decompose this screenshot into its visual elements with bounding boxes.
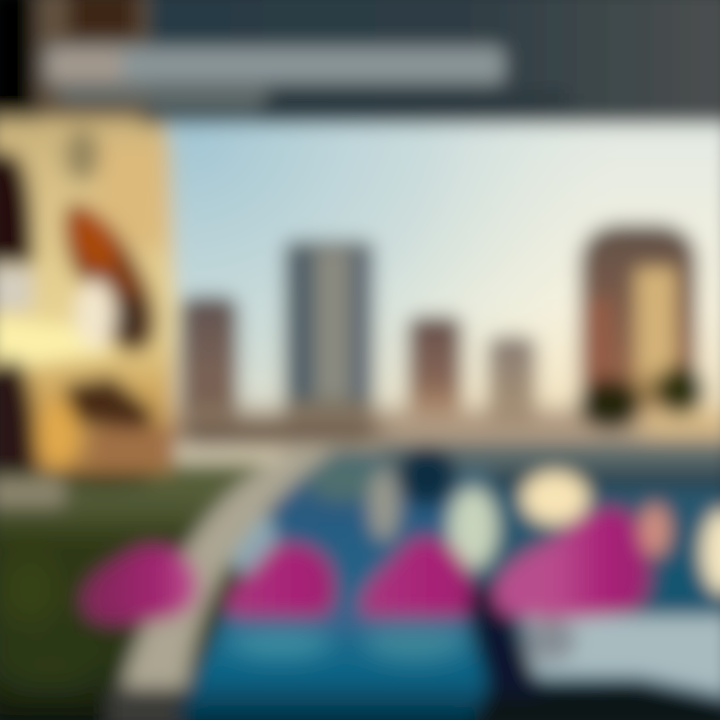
teal ripples [228,627,332,657]
sky [130,100,720,470]
ledge [0,318,120,366]
building wall [0,118,176,472]
grey upper water left [309,462,381,502]
foreground building [0,118,176,474]
header right dark band [270,92,570,108]
dark diagonal stripe [460,582,545,695]
pale panel: left [0,268,32,310]
pale kerb [0,480,64,506]
window: upper left [0,150,34,264]
blurred subtitle bar [58,87,268,103]
tower: middle [408,316,462,416]
warm right wall [95,140,167,250]
tower: arch [580,224,697,412]
brown base right [90,428,175,466]
building top left [0,0,148,118]
tower: short left [180,296,238,436]
purple band [235,612,465,626]
window: lower left [0,358,36,474]
pale blue shallow [228,508,276,576]
green highlights [4,554,56,626]
horizon haze [170,410,720,446]
flower 3 [359,537,472,616]
pool water [170,442,720,720]
peach bloom [640,504,670,556]
dark lower right [470,680,720,720]
arch rust highlight [58,201,126,279]
pale reflections [449,472,720,696]
window: middle arch [64,204,156,352]
promenade band [380,442,720,468]
header band [0,0,720,124]
palms [578,365,705,430]
blurred title bar [46,47,504,83]
flower 4 [494,508,650,618]
dark hedge [55,463,155,485]
flower 1 [80,546,198,624]
curved path [122,448,335,688]
band background [140,0,720,124]
grey reflection left [369,469,399,541]
orange glow [38,400,78,468]
arch shadow [115,292,151,352]
dark upper right band [490,468,720,498]
tower: right small [488,336,536,432]
water base [170,450,720,720]
lawn details [0,463,155,690]
tower: tall grey [284,240,374,436]
flower 2 [226,543,335,616]
right water block [470,490,720,640]
pink flowers [80,504,670,624]
blurred title warm end [50,50,122,80]
path lower grey [108,688,180,720]
lawn [0,462,278,720]
lower band tint [150,88,260,122]
window: lower right [66,376,152,432]
dark water [397,446,457,506]
pale panel: middle [75,280,115,348]
upper balcony patch [64,129,100,181]
background towers [170,224,720,446]
